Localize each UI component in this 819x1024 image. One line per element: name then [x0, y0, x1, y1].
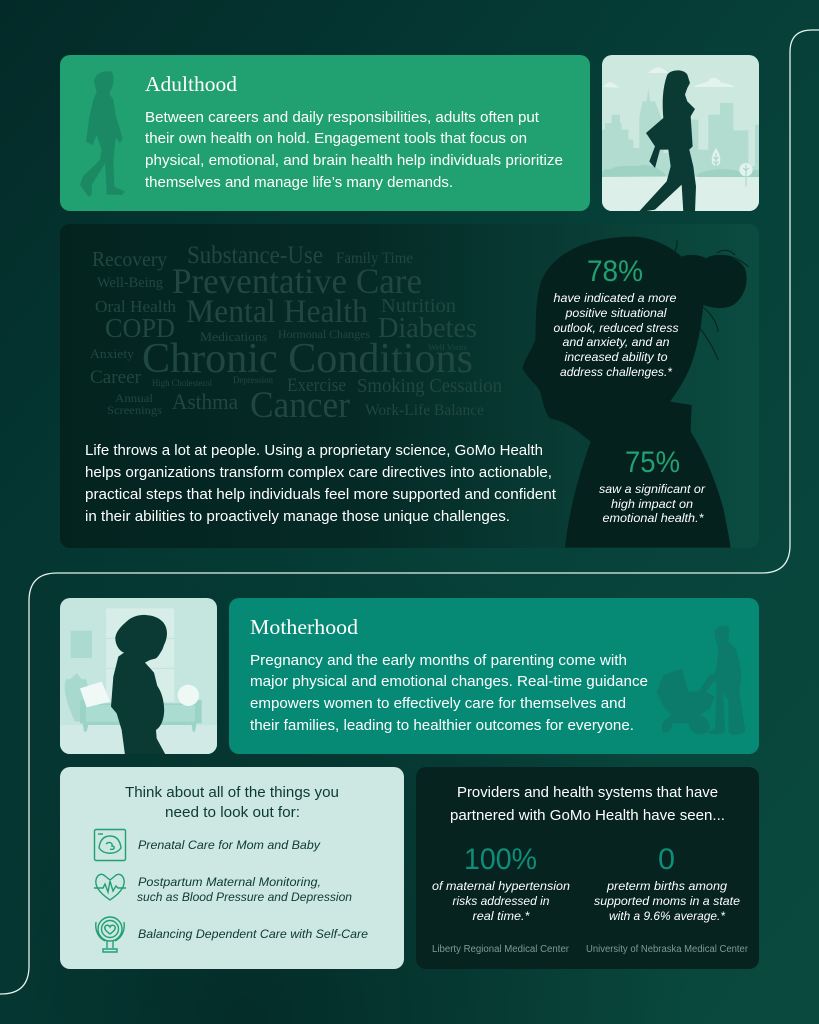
text block: motherhood description: empowers women to effectively care for themselves and [250, 695, 626, 712]
silhouette: pregnant woman [111, 615, 167, 755]
icon: ultrasound [94, 830, 126, 860]
word cloud: Medications [200, 329, 267, 344]
word cloud: Hormonal Changes [278, 327, 370, 341]
heading: look out for: Think about all of the things you [125, 784, 339, 801]
stat: 75%: 75% [625, 446, 680, 479]
word cloud: Cancer [250, 385, 350, 426]
word cloud: Screenings [107, 403, 162, 417]
word cloud: Smoking Cessation [357, 375, 502, 397]
text block: adulthood description [145, 109, 563, 191]
panel: things to look out for [60, 767, 404, 969]
heading: providers and health systems: partnered with GoMo Health have seen... [450, 807, 725, 824]
word cloud [90, 242, 502, 426]
clouds [603, 67, 735, 88]
text block: adulthood description: their own health on hold. Engagement tools that focus on [145, 130, 527, 147]
text block: GoMo Health science: helps organizations transform complex care directives into actionable, [85, 464, 552, 481]
stat: 100%: 100% [464, 843, 537, 876]
panel: motherhood [229, 598, 759, 754]
cushions [80, 682, 110, 707]
stat: 78%: address challenges.* [560, 365, 672, 379]
word cloud: Depression [233, 375, 273, 385]
heading: providers and health systems: Providers and health systems that have [457, 784, 718, 801]
stat: 0 preterm births: with a 9.6% average.* [609, 909, 725, 923]
panel: pregnant woman illustration [60, 598, 217, 756]
stat: 0 preterm births [586, 843, 749, 955]
stat: 75%: emotional health.* [602, 511, 704, 525]
heading: providers and health systems [450, 784, 725, 824]
silhouette: walking woman [638, 70, 696, 212]
word cloud: Family Time [336, 250, 413, 267]
wall picture [71, 631, 92, 658]
icon: mirror with heart [96, 917, 124, 952]
stat: 0 preterm births: 0 [658, 843, 675, 876]
heading: look out for [125, 784, 339, 821]
word cloud: Mental Health [186, 294, 368, 330]
stat: 0 preterm births: preterm births among [606, 879, 727, 893]
source: Liberty Regional Medical Center: Liberty Regional Medical Center [432, 944, 570, 955]
word cloud: Annual [115, 391, 154, 405]
text block: motherhood description: Pregnancy and the early months of parenting come with [250, 652, 627, 669]
list item: prenatal care: Prenatal Care for Mom and Baby [138, 838, 321, 852]
text block: GoMo Health science: in their abilities to proactively manage those unique challenges. [85, 508, 510, 525]
text block: adulthood description: physical, emotional, and brain health help individuals prioritize [145, 152, 563, 169]
word cloud: Career [90, 367, 142, 388]
word cloud: Chronic Conditions [142, 336, 473, 382]
text block: adulthood description: themselves and manage life’s many demands. [145, 174, 453, 191]
word cloud: Diabetes [378, 313, 477, 344]
panel: city walking illustration [602, 55, 760, 213]
stat: 100%: real time.* [472, 909, 530, 923]
word cloud: Work-Life Balance [365, 402, 484, 419]
icon: heart with pulse [94, 874, 126, 900]
stat: 78%: and anxiety, and an [562, 335, 670, 349]
icon: walking person [80, 71, 125, 197]
stat: 78%: positive situational [564, 306, 667, 320]
word cloud: Well-Being [97, 275, 163, 291]
stat: 100% [432, 843, 570, 955]
word cloud: Preventative Care [172, 261, 422, 301]
word cloud: COPD [105, 313, 175, 343]
heading: Adulthood: Adulthood [145, 72, 238, 96]
panel: adulthood [60, 55, 590, 211]
text block: GoMo Health science: practical steps that help individuals feel more supported and confident [85, 486, 557, 503]
list item: postpartum monitoring: such as Blood Pressure and Depression [137, 890, 352, 904]
sofa [80, 700, 202, 732]
word cloud: Substance-Use [187, 242, 323, 269]
word cloud: Anxiety [90, 346, 135, 361]
word cloud: Nutrition [381, 295, 456, 317]
skyline [602, 88, 760, 176]
silhouette: woman profile with hair bun [523, 237, 748, 548]
list item: postpartum monitoring: Postpartum Maternal Monitoring, [138, 875, 321, 889]
window [106, 608, 174, 702]
heading: look out for: need to look out for: [165, 804, 300, 821]
plant [65, 673, 88, 722]
stat: 78%: 78% [587, 255, 643, 288]
list item: balancing care: Balancing Dependent Care with Self-Care [138, 927, 368, 941]
heading: Motherhood: Motherhood [250, 615, 359, 639]
stat: 78%: increased ability to [564, 350, 668, 364]
word cloud: Oral Health [95, 297, 176, 316]
source: University of Nebraska Medical Center: University of Nebraska Medical Center [586, 944, 749, 955]
stat: 78%: outlook, reduced stress [554, 321, 678, 335]
word cloud: Well Visits [428, 343, 467, 352]
word cloud: Exercise [287, 375, 346, 396]
word cloud: Recovery [92, 247, 167, 271]
list item: postpartum monitoring [137, 875, 352, 904]
text block: adulthood description: Between careers and daily responsibilities, adults often put [145, 109, 540, 126]
text block: GoMo Health science [85, 442, 557, 525]
word cloud: Asthma [172, 389, 238, 414]
trees [712, 148, 720, 166]
word cloud: High Cholesterol [152, 378, 212, 388]
stat: 78% [554, 255, 678, 379]
stat: 75%: high impact on [611, 497, 693, 511]
stat: 75%: saw a significant or [599, 482, 706, 496]
panel: adulthood word cloud and statistics [60, 224, 759, 548]
text block: motherhood description: their families, leading to healthier outcomes for everyone. [250, 717, 634, 734]
text block: motherhood description: major physical and emotional changes. Real-time guidance [250, 673, 648, 690]
stat: 0 preterm births: supported moms in a state [594, 894, 740, 908]
icon: parent pushing stroller [657, 626, 745, 735]
stat: 100%: of maternal hypertension [432, 879, 570, 893]
floor [60, 725, 217, 756]
text block: motherhood description [250, 652, 648, 734]
stat: 75% [599, 446, 706, 525]
stat: 78%: have indicated a more [554, 291, 677, 305]
text block: GoMo Health science: Life throws a lot at people. Using a proprietary science, GoMo Health [85, 442, 543, 459]
panel: provider results [416, 767, 759, 969]
stat: 100%: risks addressed in [452, 894, 550, 908]
park hills [602, 165, 760, 177]
